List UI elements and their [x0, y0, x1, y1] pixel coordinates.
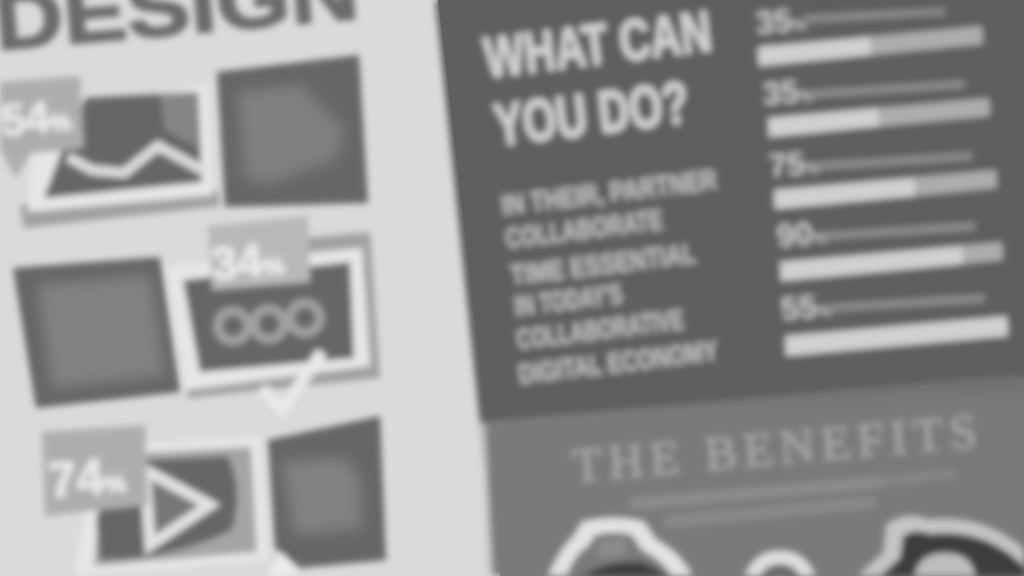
panel underlay: benefits [492, 378, 1024, 576]
card 2 text panel [13, 257, 180, 408]
card 2 icon: monitor [166, 248, 370, 390]
text: body copy: IN THEIR, PARTNER [500, 164, 718, 221]
panel: what can you do [435, 0, 1024, 424]
card 3 badge: 74%: 74% [46, 446, 128, 509]
card 3 text panel [268, 416, 386, 568]
panel left edge highlight [481, 424, 493, 576]
card 2 pointer [262, 352, 322, 410]
text: benefits subtitle [630, 468, 955, 528]
text: body copy: DIGITAL ECONOMY [517, 335, 719, 390]
heading: what can you do [481, 0, 715, 159]
card 1 text panel [217, 55, 368, 207]
panel: the benefits [480, 374, 1024, 576]
card 3 text block [282, 458, 362, 535]
panel underlay: dark [438, 0, 1024, 414]
card 3 icon: play [74, 437, 268, 576]
card 1 [0, 55, 368, 228]
text: body copy [500, 164, 719, 390]
stat 2: 35% [761, 72, 814, 112]
stat 2 [761, 72, 990, 137]
icon: benefit right [858, 516, 1024, 576]
card 3 badge: 74% [42, 425, 148, 516]
card 1 text block [238, 85, 345, 185]
card 1 badge: 54% [0, 76, 84, 178]
card 1 shadow frame [20, 190, 220, 228]
text: body copy: TIME ESSENTIAL [509, 238, 697, 291]
heading: what can you do: YOU DO? [490, 69, 692, 159]
stat 3 [767, 144, 997, 209]
stat 3: 75% [767, 144, 820, 184]
card 2 [13, 216, 380, 410]
card 1 badge: 54%: 54% [0, 91, 73, 146]
icon: benefit middle [745, 551, 815, 576]
card 3 [42, 416, 386, 576]
icon: benefit left [548, 518, 692, 576]
stat list [754, 1, 1008, 356]
stat 1: 35% [754, 1, 807, 41]
text: body copy: IN TODAY'S [513, 278, 624, 322]
text: body copy: COLLABORATE [504, 204, 665, 254]
stat 5 [779, 287, 1008, 356]
stat 4 [775, 214, 1003, 281]
stat 4: 90% [775, 214, 828, 254]
card 2 badge: 34% [208, 216, 310, 290]
stat 5: 55% [779, 287, 832, 327]
text: body copy: COLLABORATIVE [515, 304, 685, 355]
stat 1 [754, 1, 983, 66]
card 2 text block [38, 275, 165, 388]
card 2 badge: 34%: 34% [209, 232, 286, 290]
heading: the benefits: THE BENEFITS [570, 405, 978, 493]
card 1 icon: landscape [28, 84, 213, 212]
card 3 pointer [266, 552, 298, 576]
card 2 shadow frame [170, 232, 380, 398]
